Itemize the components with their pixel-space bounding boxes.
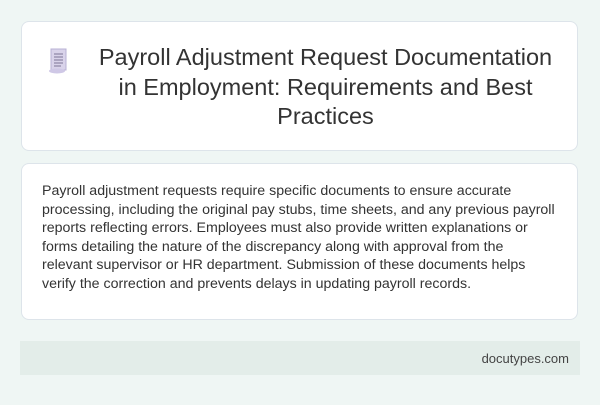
body text: Payroll adjustment requests require specific documents to ensure accurate bbox=[42, 183, 511, 199]
footer text: docutypes.com bbox=[482, 351, 569, 366]
footer bbox=[20, 341, 580, 375]
body text: forms detailing the nature of the discrepancy along with approval from the bbox=[42, 239, 503, 255]
title: Payroll Adjustment Request Documentation in Employment: Requirements and Best Practices bbox=[99, 44, 552, 129]
title card bbox=[21, 21, 578, 151]
body text: verify the correction and prevents delays in updating payroll records. bbox=[42, 276, 471, 292]
body text: relevant supervisor or HR department. Submission of these documents helps bbox=[42, 257, 525, 273]
description panel bbox=[21, 163, 578, 320]
body text: reports reflecting errors. Employees must also provide written explanations or bbox=[42, 220, 528, 236]
body text: processing, including the original pay stubs, time sheets, and any previous payroll bbox=[42, 202, 555, 218]
icon: document bbox=[49, 48, 66, 74]
body text bbox=[42, 183, 555, 292]
